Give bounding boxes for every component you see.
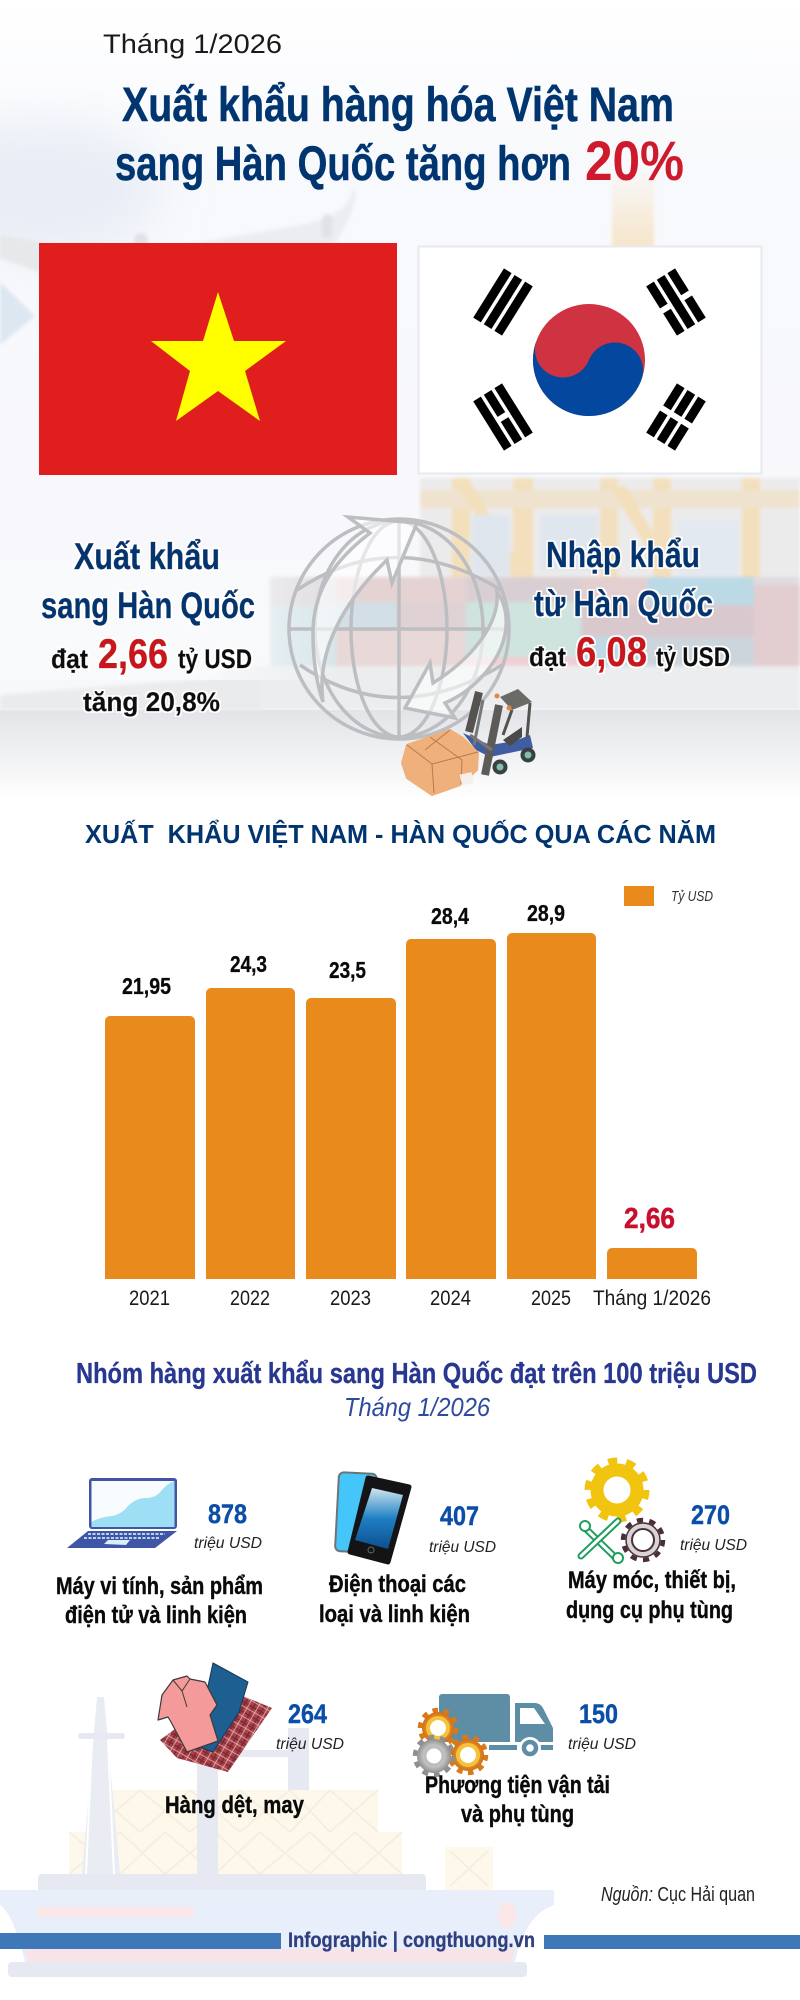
export summary: sang Hàn Quốc	[41, 585, 255, 626]
icon: forklift with parcel	[402, 689, 536, 795]
item: phones: Điện thoại các	[329, 1571, 466, 1598]
axis labels: 2024	[430, 1287, 471, 1310]
section heading: product groups: Tháng 1/2026	[344, 1392, 490, 1422]
South Korea flag	[418, 246, 762, 474]
axis labels: 2025	[531, 1287, 571, 1310]
item: phones: loại và linh kiện	[319, 1601, 470, 1628]
item: vehicles: và phụ tùng	[461, 1801, 574, 1828]
axis labels: 2022	[230, 1287, 270, 1310]
item: phones	[319, 1472, 496, 1628]
item: computers: điện tử và linh kiện	[65, 1602, 247, 1629]
item: machinery	[566, 1461, 747, 1624]
import summary: tỷ USD	[656, 642, 730, 672]
item: phones: 407	[440, 1501, 479, 1531]
value labels: 24,3	[230, 951, 267, 977]
bars	[105, 933, 697, 1279]
item: phones: triệu USD	[429, 1539, 496, 1556]
axis labels: 2021	[129, 1287, 170, 1310]
item: machinery: Máy móc, thiết bị,	[568, 1567, 736, 1594]
axis labels: Tháng 1/2026	[593, 1287, 711, 1310]
item: vehicles: Phương tiện vận tải	[425, 1772, 610, 1799]
value labels: 28,4	[431, 903, 469, 929]
title: Xuất khẩu hàng hóa Việt Nam	[122, 79, 674, 132]
item: textiles	[158, 1663, 344, 1819]
item: vehicles: triệu USD	[568, 1736, 636, 1753]
title: sang Hàn Quốc tăng hơn	[115, 138, 571, 191]
value labels: 28,9	[527, 900, 565, 926]
footer: Infographic | congthuong.vn	[288, 1929, 535, 1952]
import summary: đạt	[529, 642, 566, 672]
export summary: Xuất khẩu	[74, 536, 220, 577]
footer	[0, 1929, 800, 1952]
legend	[624, 886, 713, 906]
icon: gears and tools	[580, 1461, 663, 1563]
Vietnam flag	[39, 243, 397, 475]
background: port photo	[0, 0, 800, 800]
item: machinery: triệu USD	[680, 1537, 747, 1554]
export summary: 2,66	[98, 630, 168, 677]
icon: globe with trade arrows	[289, 517, 509, 739]
axis labels: 2023	[330, 1287, 371, 1310]
icon: clothes	[158, 1663, 272, 1772]
export summary: tăng 20,8%	[83, 687, 220, 717]
axis labels	[129, 1287, 711, 1310]
icon: laptop	[67, 1478, 177, 1548]
item: textiles: 264	[288, 1699, 327, 1729]
item: vehicles	[415, 1694, 636, 1828]
icon: smartphones	[335, 1472, 409, 1562]
item: computers: Máy vi tính, sản phẩm	[56, 1573, 263, 1600]
item: vehicles: 150	[579, 1699, 618, 1729]
item: computers: triệu USD	[194, 1535, 262, 1552]
value labels: 23,5	[329, 957, 366, 983]
icon: truck and gears	[415, 1694, 553, 1775]
value labels: 2,66	[624, 1203, 675, 1235]
export summary	[41, 536, 255, 717]
import summary	[529, 534, 730, 675]
legend: Tỷ USD	[671, 888, 713, 905]
title	[115, 79, 684, 192]
import summary: từ Hàn Quốc	[534, 583, 713, 624]
chart heading: XUẤT KHẨU VIỆT NAM - HÀN QUỐC QUA CÁC NĂM	[85, 819, 716, 849]
item: machinery: dụng cụ phụ tùng	[566, 1597, 733, 1624]
section heading: product groups	[76, 1358, 757, 1422]
import summary: 6,08	[576, 628, 647, 675]
title: 20%	[585, 129, 684, 192]
item: computers: 878	[208, 1499, 247, 1529]
item: textiles: Hàng dệt, may	[165, 1792, 305, 1819]
value labels	[122, 900, 675, 1235]
export summary: tỷ USD	[178, 644, 252, 674]
background: cargo ship	[0, 1697, 554, 1977]
source note: Nguồn: Cục Hải quan	[601, 1884, 755, 1906]
item: machinery: 270	[691, 1500, 730, 1530]
export summary: đạt	[51, 644, 88, 674]
date heading: Tháng 1/2026	[103, 29, 282, 59]
bar chart	[105, 886, 713, 1310]
item: textiles: triệu USD	[276, 1736, 344, 1753]
import summary: Nhập khẩu	[546, 534, 700, 575]
item: computers	[56, 1478, 263, 1629]
value labels: 21,95	[122, 973, 171, 999]
